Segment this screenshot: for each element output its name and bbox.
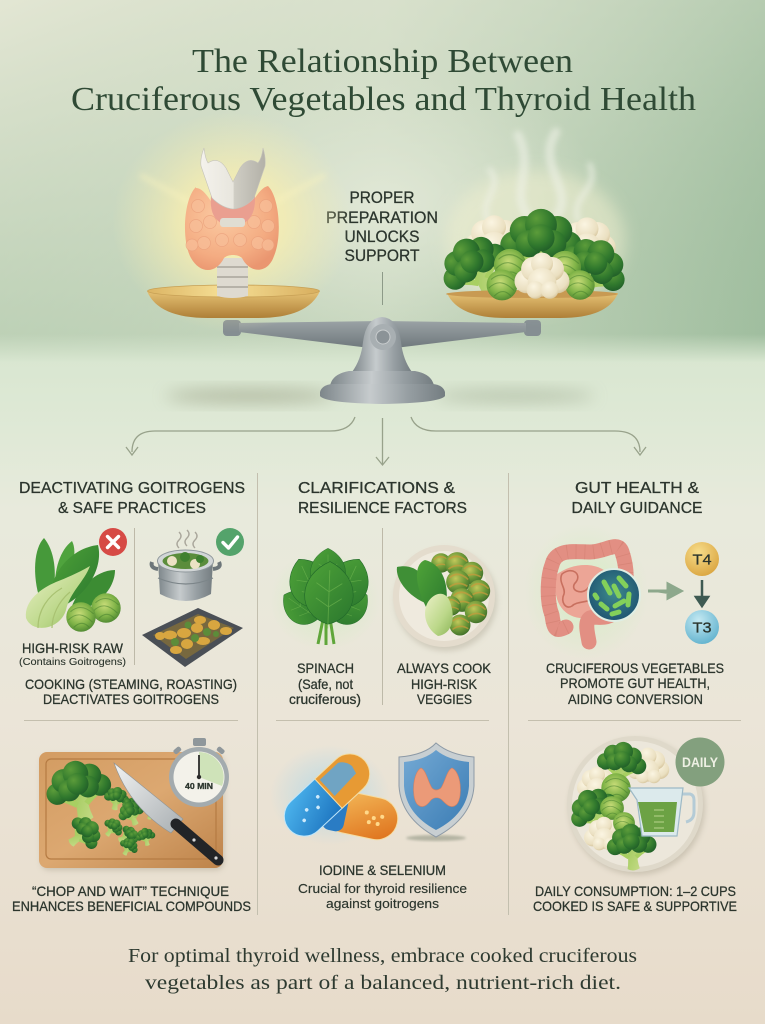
text: cooking deactivates goitrogens: DEACTIVATES GOITROGENS	[43, 691, 219, 707]
icon: red cross	[99, 528, 127, 556]
arrow: gut to hormone conversion	[648, 584, 681, 598]
text: chop and wait: ENHANCES BENEFICIAL COMPOUNDS	[12, 898, 251, 914]
text: daily consumption: DAILY CONSUMPTION: 1–2 CUPS	[535, 883, 736, 899]
title: Cruciferous Vegetables and Thyroid Health	[71, 81, 696, 118]
icon: green check	[216, 528, 244, 556]
label: high-risk raw: HIGH-RISK RAW	[22, 641, 123, 656]
panel: deactivating goitrogens and safe practices	[12, 480, 251, 914]
heading	[19, 480, 245, 517]
heading: & SAFE PRACTICES	[58, 500, 206, 517]
icon: iodine and selenium capsules	[270, 745, 402, 845]
text: cooking deactivates goitrogens	[25, 676, 237, 707]
icon: spinach	[270, 548, 380, 650]
label: high-risk raw	[19, 641, 126, 668]
illustration: chop and wait on cutting board	[39, 738, 229, 870]
flow arrows to columns	[126, 417, 646, 465]
label: spinach: cruciferous)	[289, 691, 361, 707]
central caption: PREPARATION	[326, 208, 438, 227]
icon: roasting tray	[142, 608, 243, 667]
heading: GUT HEALTH &	[575, 480, 699, 497]
icon: T3 badge	[685, 610, 719, 644]
text: gut health: AIDING CONVERSION	[568, 691, 703, 707]
icon: raw bok choy and sprouts	[26, 538, 121, 632]
label: always cook: HIGH-RISK	[411, 676, 478, 692]
title	[71, 43, 696, 118]
label: always cook: VEGGIES	[417, 691, 472, 707]
icon: stopwatch	[169, 738, 229, 807]
text: daily consumption	[533, 883, 737, 914]
icon: T3 badge: T3	[692, 620, 712, 636]
text: gut health	[546, 660, 724, 707]
text: iodine and selenium: against goitrogens	[326, 896, 440, 911]
heading	[572, 480, 702, 517]
panel: gut health and daily guidance	[524, 480, 741, 914]
thyroid gland	[185, 186, 279, 270]
text: daily consumption: COOKED IS SAFE & SUPPORTIVE	[533, 898, 737, 914]
label: spinach	[289, 660, 361, 707]
left pan with thyroid	[112, 112, 352, 332]
label: always cook: ALWAYS COOK	[397, 660, 492, 676]
steam	[486, 132, 592, 225]
title: The Relationship Between	[192, 43, 573, 80]
central caption: SUPPORT	[344, 246, 420, 265]
icon: daily badge: DAILY	[682, 755, 718, 770]
beam and stand	[223, 317, 541, 404]
icon: T4 badge	[685, 542, 719, 576]
heading: DAILY GUIDANCE	[572, 500, 702, 517]
central caption	[326, 188, 438, 305]
icon: plate of cooked vegetables	[393, 545, 497, 651]
heading: RESILIENCE FACTORS	[298, 500, 467, 517]
text: iodine and selenium	[298, 862, 467, 911]
icon: T4 badge: T4	[692, 552, 712, 568]
icon: intestines with microbiome	[524, 524, 648, 660]
central caption: PROPER	[350, 188, 414, 207]
balance scale	[112, 112, 638, 404]
label: spinach: SPINACH	[297, 660, 354, 676]
closing statement: For optimal thyroid wellness, embrace cooked cruciferous	[128, 945, 637, 967]
label: high-risk raw: (Contains Goitrogens)	[19, 656, 126, 668]
icon: stopwatch: 40 MIN	[185, 782, 213, 791]
label: always cook	[397, 660, 492, 707]
text: iodine and selenium: IODINE & SELENIUM	[319, 862, 446, 878]
ground shadows	[165, 389, 595, 403]
closing statement: vegetables as part of a balanced, nutrient-rich diet.	[145, 972, 621, 994]
heading: CLARIFICATIONS &	[298, 480, 455, 497]
arrow: T4 to T3	[696, 580, 708, 606]
panel: clarifications and resilience factors	[270, 480, 497, 911]
text: iodine and selenium: Crucial for thyroid resilience	[298, 881, 467, 896]
cartilage	[201, 148, 265, 209]
text: gut health: PROMOTE GUT HEALTH,	[560, 675, 710, 691]
text: chop and wait: “CHOP AND WAIT” TECHNIQUE	[32, 883, 229, 899]
right pan with vegetables	[430, 132, 638, 318]
icon: steaming pot	[152, 530, 220, 601]
text: chop and wait	[12, 883, 251, 914]
heading	[298, 480, 467, 517]
label: spinach: (Safe, not	[298, 676, 353, 692]
column dividers	[258, 473, 508, 915]
closing statement	[128, 945, 637, 994]
knife	[114, 763, 218, 860]
measuring cup	[629, 788, 694, 836]
icon: daily badge	[676, 738, 724, 786]
illustration: daily plate with measuring cup	[561, 736, 724, 875]
icon: thyroid shield	[399, 743, 474, 841]
heading: DEACTIVATING GOITROGENS	[19, 480, 245, 497]
text: cooking deactivates goitrogens: COOKING (STEAMING, ROASTING)	[25, 676, 237, 692]
central caption: UNLOCKS	[344, 227, 420, 246]
text: gut health: CRUCIFEROUS VEGETABLES	[546, 660, 724, 676]
